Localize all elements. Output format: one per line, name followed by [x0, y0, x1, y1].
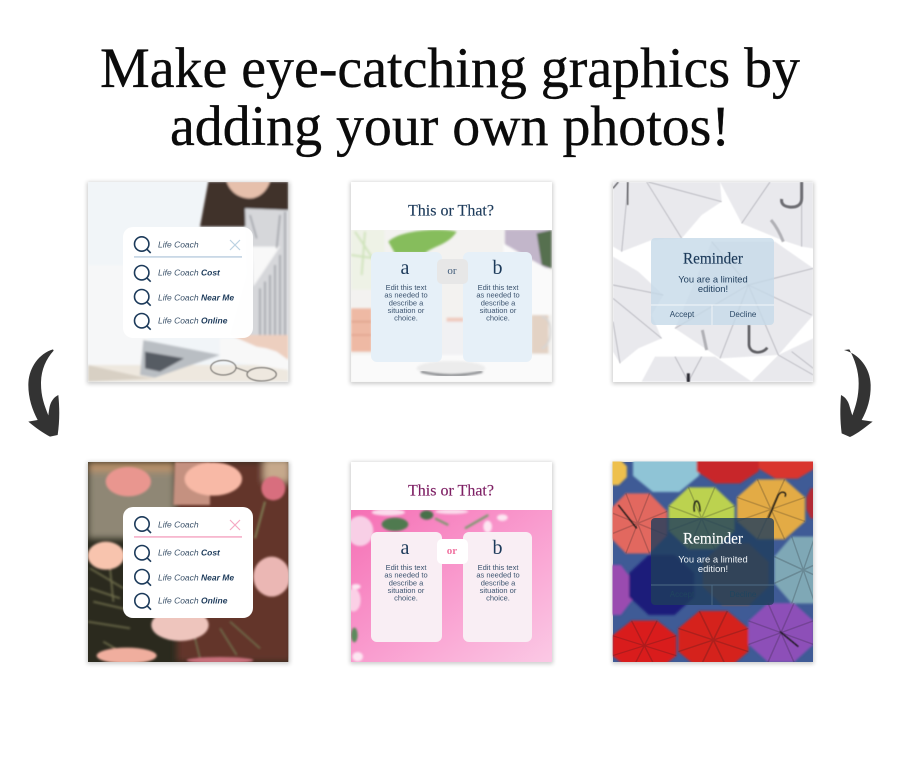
option b card: choice. — [486, 314, 510, 323]
or badge — [437, 539, 468, 564]
option a card: choice. — [394, 314, 418, 323]
reminder dialog — [651, 518, 774, 605]
option b card: describe a — [481, 298, 516, 307]
option a card: a — [401, 257, 410, 279]
reminder dialog: Accept — [670, 310, 695, 319]
option a card: choice. — [394, 594, 418, 603]
search box: Life Coach Near Me — [158, 292, 234, 302]
reminder dialog: Reminder — [683, 250, 744, 268]
option b card: situation or — [480, 306, 517, 315]
reminder dialog — [651, 238, 774, 325]
arrow: left curved down — [28, 349, 59, 437]
option b card: b — [492, 257, 502, 279]
option b card: as needed to — [476, 291, 520, 300]
reminder dialog: Decline — [730, 590, 757, 599]
reminder dialog: You are a limited — [678, 554, 748, 564]
option a card: Edit this text — [386, 283, 427, 292]
option b card: Edit this text — [478, 563, 519, 572]
title — [100, 37, 800, 158]
or badge — [437, 259, 468, 284]
reminder dialog: You are a limited — [678, 274, 748, 284]
search box: Life Coach Online — [158, 596, 228, 606]
option a card — [371, 532, 442, 642]
header: this or that: This or That? — [408, 202, 494, 220]
panel: search template, flower photo — [87, 459, 292, 664]
option a card: as needed to — [384, 291, 428, 300]
option a card: situation or — [388, 586, 425, 595]
option b card: as needed to — [476, 571, 520, 580]
photo: peonies — [88, 459, 292, 664]
option a card: describe a — [389, 578, 424, 587]
search box: Life Coach Cost — [158, 548, 221, 558]
panel: reminder template, colourful umbrellas — [594, 438, 832, 671]
photo: desk with plant — [351, 230, 552, 382]
header: this or that: This or That? — [408, 482, 494, 500]
option b card: b — [492, 537, 502, 559]
search box — [123, 227, 253, 338]
option a card: Edit this text — [386, 563, 427, 572]
search box: Life Coach Online — [158, 316, 228, 326]
option a card: a — [401, 537, 410, 559]
reminder dialog: Decline — [730, 310, 757, 319]
option b card: situation or — [480, 586, 517, 595]
option b card: choice. — [486, 594, 510, 603]
reminder dialog: Reminder — [683, 530, 744, 548]
photo: pink flowers — [346, 509, 552, 662]
header: this or that — [351, 462, 552, 510]
search box: Life Coach Near Me — [158, 572, 234, 582]
header: this or that — [351, 182, 552, 230]
option a card: situation or — [388, 306, 425, 315]
panel: search template, original photo — [87, 182, 290, 384]
option b card: Edit this text — [478, 283, 519, 292]
option a card: as needed to — [384, 571, 428, 580]
panel: this or that template, pink photo — [346, 462, 553, 664]
search box: Life Coach Cost — [158, 268, 221, 278]
photo: white umbrellas — [613, 182, 813, 382]
photo: colourful umbrellas — [594, 438, 832, 671]
title: adding your own photos! — [170, 95, 730, 158]
title: Make eye-catching graphics by — [100, 37, 800, 100]
option b card — [463, 252, 532, 362]
option b card: describe a — [481, 578, 516, 587]
reminder dialog: edition! — [698, 283, 728, 294]
panel: this or that template, original photo — [350, 182, 553, 384]
option b card — [463, 532, 532, 642]
panel: reminder template, original photo — [612, 182, 814, 384]
photo: woman at laptop — [88, 182, 288, 382]
option a card — [371, 252, 442, 362]
or badge: or — [447, 545, 457, 557]
reminder dialog: Accept — [670, 590, 695, 599]
option a card: describe a — [389, 298, 424, 307]
search box: Life Coach — [158, 520, 199, 530]
search box — [123, 507, 253, 618]
arrow: right curved down — [840, 349, 873, 437]
reminder dialog: edition! — [698, 563, 728, 574]
or badge: or — [447, 265, 457, 277]
search box: Life Coach — [158, 240, 199, 250]
